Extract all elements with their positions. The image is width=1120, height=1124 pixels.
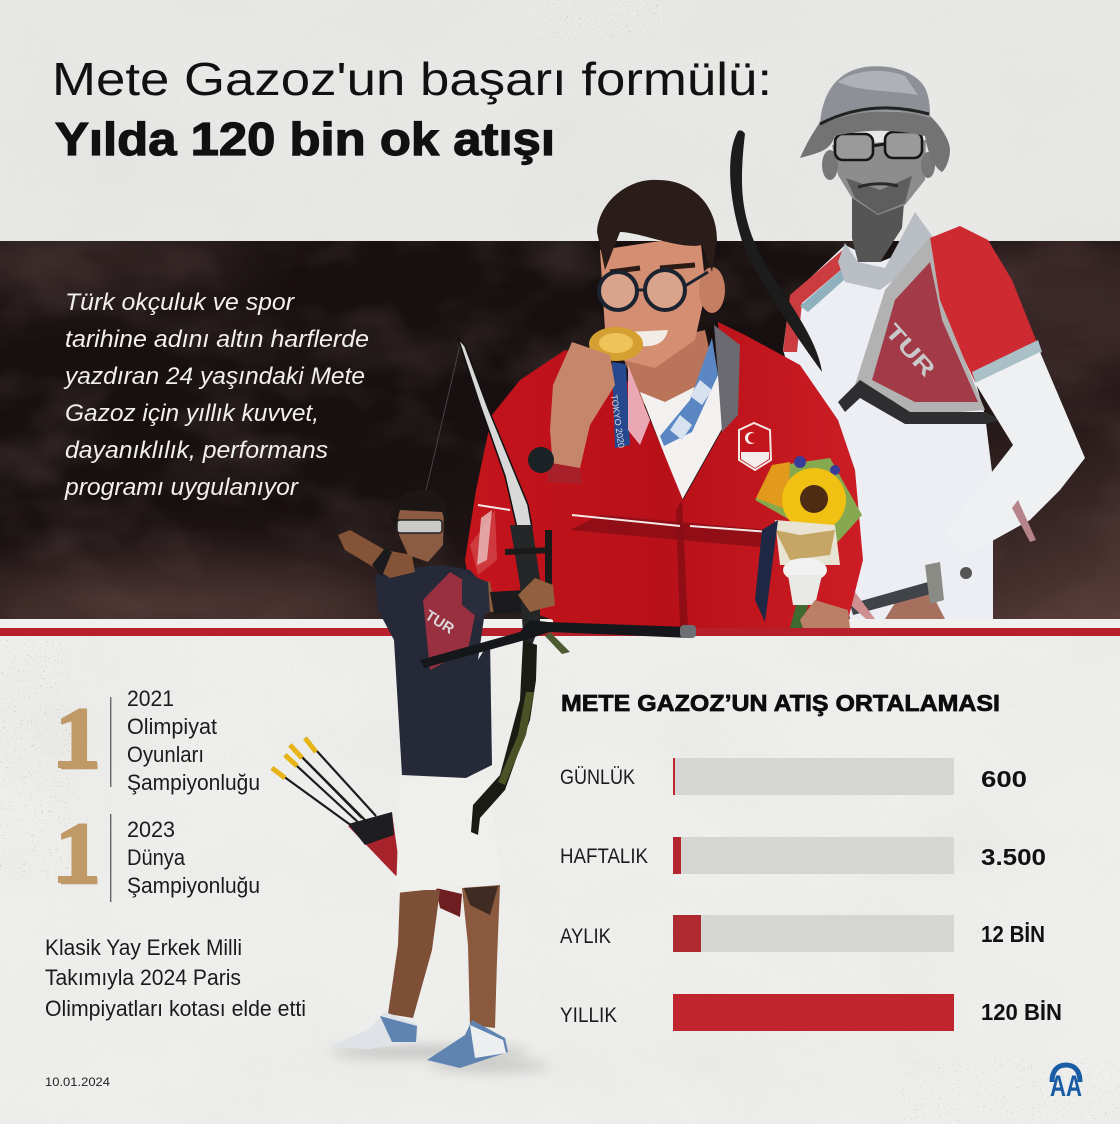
- bar: weekly: HAFTALIK: [560, 845, 648, 868]
- achievement: 2021 Olympic champion: Olimpiyat: [127, 714, 217, 739]
- bow riser and sight: [510, 525, 540, 650]
- achievement: 2023 World champion: Şampiyonluğu: [127, 873, 260, 898]
- bow lower limb: [471, 640, 537, 835]
- icon: AA agency logo: [1050, 1065, 1082, 1103]
- photo: archer in bucket hat, black and white head: [783, 66, 1085, 619]
- achievement: 2021 Olympic champion: 1: [55, 691, 101, 788]
- intro text block: Türk okçuluk ve spor: [65, 289, 295, 316]
- checkered ribbon: [660, 338, 718, 446]
- stabilizer rod: [420, 620, 696, 668]
- sunflower: [782, 468, 846, 532]
- shorts: [396, 777, 501, 893]
- bouquet: [755, 458, 862, 545]
- quiver: [348, 813, 400, 876]
- legs: [388, 890, 440, 1018]
- blue ribbon: [612, 362, 630, 448]
- intro text block: tarihine adını altın harflerde: [65, 326, 369, 353]
- extended arm: [464, 576, 554, 612]
- text block: Paris 2024 quota: Olimpiyatları kotası elde etti: [45, 996, 306, 1021]
- title: [52, 53, 772, 165]
- watch: [546, 462, 582, 484]
- bar: monthly: [560, 915, 1045, 952]
- title: Yılda 120 bin ok atışı: [55, 113, 555, 165]
- achievement: 2023 World champion: 2023: [127, 817, 175, 842]
- jacket: [465, 322, 863, 628]
- bar: monthly: AYLIK: [560, 925, 611, 948]
- collar: [838, 212, 935, 290]
- bar: yearly: 120 BİN: [981, 999, 1062, 1025]
- achievement: 2021 Olympic champion: Oyunları: [127, 742, 204, 767]
- hand and sight: [885, 590, 945, 619]
- bar: weekly: 3.500: [981, 844, 1046, 870]
- red sleeve: [930, 226, 1040, 382]
- achievement: 2021 Olympic champion: 2021: [127, 686, 174, 711]
- bow top limb: [458, 338, 532, 528]
- achievement: 2023 World champion: [55, 806, 260, 903]
- hair: [597, 180, 717, 272]
- achievement: 2023 World champion: Dünya: [127, 845, 186, 870]
- photo: medal winner in red jacket: [465, 180, 863, 628]
- arrows: [272, 738, 376, 826]
- intro text block: dayanıklılık, performans: [65, 437, 328, 464]
- bar chart: shooting averages: [560, 690, 1062, 1031]
- hand: [550, 342, 615, 468]
- bow hand: [518, 578, 555, 612]
- head: [398, 506, 444, 562]
- head: [600, 235, 706, 368]
- bar: yearly: [560, 994, 1062, 1031]
- intro text block: yazdıran 24 yaşındaki Mete: [63, 363, 365, 390]
- bucket hat: [800, 111, 950, 172]
- achievement: 2023 World champion: 1: [55, 806, 101, 903]
- shirt: [783, 240, 993, 619]
- national emblem: [739, 423, 771, 470]
- achievement: 2021 Olympic champion: [55, 686, 260, 795]
- panel: dark band: [0, 241, 1120, 636]
- lower hand: [800, 600, 850, 628]
- text block: Paris 2024 quota: Klasik Yay Erkek Milli: [45, 935, 242, 960]
- intro text block: Gazoz için yıllık kuvvet,: [65, 400, 319, 427]
- intro text block: [63, 289, 369, 501]
- white arm sleeve: [945, 352, 1085, 556]
- gold medal: [589, 327, 643, 361]
- photo: archer drawing the bow: TUR: [422, 607, 457, 638]
- mouth: [628, 330, 668, 346]
- chest guard: [855, 237, 985, 416]
- bar: daily: [560, 758, 1027, 795]
- date: 10.01.2024: [45, 1077, 111, 1089]
- photo: black bow limb behind medal winner: [730, 130, 822, 372]
- text block: Paris 2024 quota: [45, 935, 306, 1021]
- achievement: 2021 Olympic champion: Şampiyonluğu: [127, 770, 260, 795]
- sleeve badge: [477, 510, 492, 565]
- bow string: [405, 345, 475, 832]
- photo: archer in bucket hat, black and white head: TUR: [880, 319, 940, 382]
- photo: archer drawing the bow: [272, 338, 696, 1071]
- bar: daily: 600: [981, 766, 1027, 792]
- ground shadow: [330, 1046, 530, 1058]
- head: [832, 140, 926, 215]
- neck: [620, 330, 720, 440]
- shoes: [330, 1012, 418, 1049]
- title: Mete Gazoz'un başarı formülü:: [52, 53, 772, 105]
- photo: medal winner in red jacket: TOKYO 2020: [609, 394, 626, 449]
- intro text block: programı uygulanıyor: [64, 474, 299, 501]
- text block: Paris 2024 quota: Takımıyla 2024 Paris: [45, 965, 241, 990]
- chart heading: METE GAZOZ’UN ATIŞ ORTALAMASI: [561, 690, 1000, 716]
- bar: weekly: [560, 837, 1046, 874]
- bar: monthly: 12 BİN: [981, 921, 1045, 947]
- glasses: [599, 272, 637, 310]
- drawing arm: [338, 530, 415, 578]
- bar: daily: GÜNLÜK: [560, 766, 635, 789]
- icon: AA agency logo: AA: [1050, 1070, 1082, 1103]
- grey collar lining: [714, 325, 740, 432]
- neck: [852, 190, 905, 262]
- bar: yearly: YILLIK: [560, 1004, 617, 1027]
- white shirt: [640, 375, 728, 500]
- mascot and wrap: [775, 520, 840, 565]
- t-shirt: [375, 565, 492, 778]
